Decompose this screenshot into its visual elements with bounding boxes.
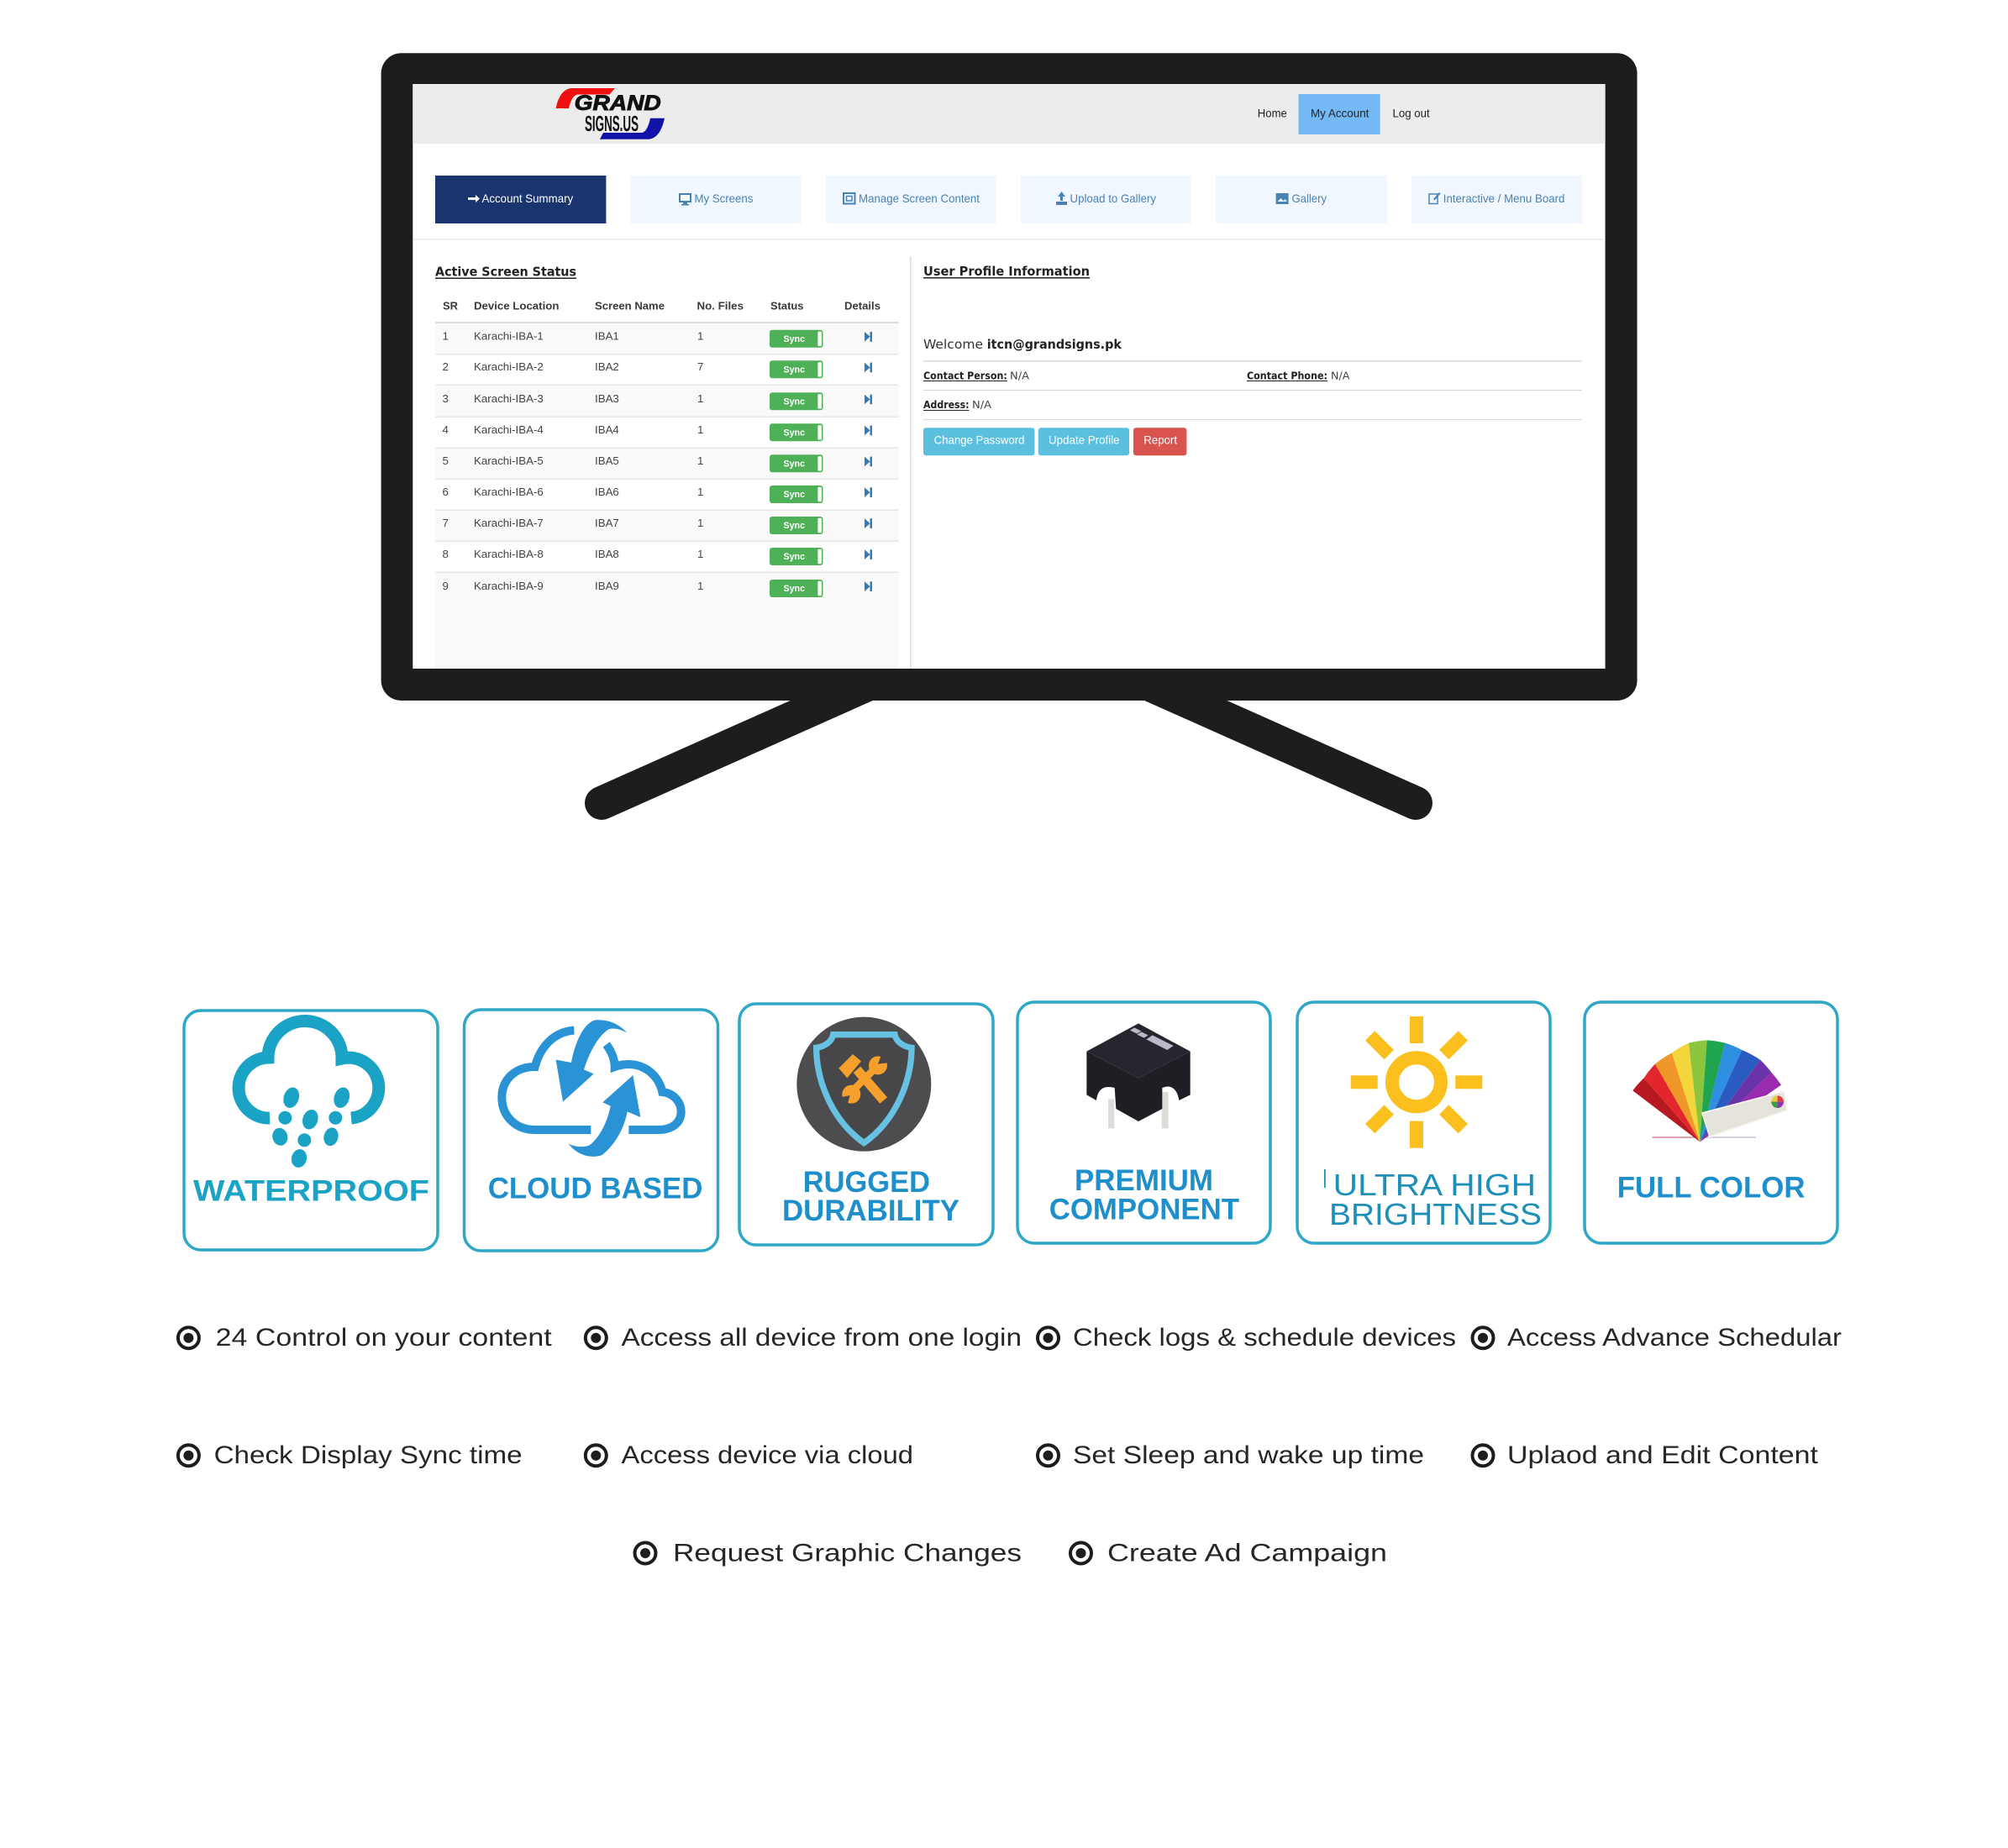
monitor — [381, 53, 1637, 803]
card: premium component — [1017, 1002, 1270, 1243]
row 8: Karachi-IBA-8 — [474, 548, 544, 560]
label: DURABILITY — [782, 1194, 959, 1227]
label: BRIGHTNESS — [1329, 1197, 1542, 1231]
row 2: Sync — [783, 365, 805, 375]
row 5: Sync — [783, 459, 805, 469]
label: PREMIUM — [1075, 1164, 1213, 1197]
card: ultra high brightness — [1297, 1002, 1550, 1243]
tab: account summary — [435, 176, 606, 223]
monitor bezel — [381, 53, 1637, 701]
row 5: IBA5 — [595, 454, 619, 467]
row 7: 7 — [442, 517, 449, 529]
row 2: IBA2 — [595, 360, 619, 373]
dashboard screen — [413, 84, 1606, 669]
row 3 — [442, 392, 872, 410]
button: change password — [923, 428, 1035, 455]
welcome line — [923, 337, 1122, 352]
tab: interactive menu board — [1411, 176, 1582, 223]
address: Address: — [923, 398, 970, 411]
button: report: Report — [1143, 433, 1177, 447]
row 6: 6 — [442, 486, 449, 498]
tab: manage screen content — [826, 176, 996, 223]
logo: GRAND — [575, 92, 661, 115]
row 5: Karachi-IBA-5 — [474, 454, 544, 467]
icon: sun — [1351, 1016, 1482, 1148]
table header: Screen Name — [595, 299, 665, 312]
navigation: My Account — [1311, 106, 1369, 119]
table header: No. Files — [697, 299, 744, 312]
row 9: Sync — [783, 584, 805, 594]
feature: access all devices: Access all device from one login — [622, 1324, 1022, 1352]
navigation — [1258, 94, 1430, 134]
row 3: Karachi-IBA-3 — [474, 392, 544, 405]
panel: user profile information — [923, 264, 1582, 455]
button: change password: Change Password — [934, 433, 1025, 447]
label: CLOUD BASED — [488, 1173, 702, 1205]
feature: display sync time: Check Display Sync time — [214, 1441, 523, 1469]
logo: SIGNS.US — [585, 111, 639, 136]
tab: manage screen content: Manage Screen Content — [859, 192, 980, 205]
tab: my screens: My Screens — [694, 192, 753, 205]
row 6: Sync — [783, 490, 805, 500]
feature: graphic changes: Request Graphic Changes — [673, 1539, 1022, 1567]
table header: SR — [443, 299, 459, 312]
feature: sleep and wake: Set Sleep and wake up time — [1073, 1441, 1424, 1469]
icon: shield with tools — [796, 1017, 931, 1152]
table header — [443, 299, 880, 312]
label — [1324, 1168, 1542, 1231]
contact details: Contact Phone: — [1247, 370, 1327, 382]
row 1: IBA1 — [595, 329, 619, 343]
row 4: 1 — [697, 423, 703, 436]
tab: my screens — [630, 176, 802, 223]
contact details — [923, 370, 1350, 382]
row 7: IBA7 — [595, 517, 619, 529]
icon: electronic component — [1086, 1023, 1191, 1128]
row 4: 4 — [442, 423, 449, 436]
row 6: Karachi-IBA-6 — [474, 486, 544, 498]
row 2: 2 — [442, 360, 449, 373]
table header: Details — [844, 299, 880, 312]
row 7: Sync — [783, 521, 805, 531]
feature: check logs: Check logs & schedule devices — [1073, 1324, 1456, 1352]
tab: interactive menu board: Interactive / Menu Board — [1443, 192, 1564, 205]
contact details: Contact Person: — [923, 370, 1007, 382]
row 8: Sync — [783, 552, 805, 562]
label: FULL COLOR — [1617, 1171, 1805, 1205]
welcome line: Welcome — [923, 337, 983, 352]
row 2: Karachi-IBA-2 — [474, 360, 544, 373]
card: waterproof — [184, 1011, 438, 1250]
row 9: 9 — [442, 580, 449, 592]
card: full color — [1585, 1002, 1837, 1243]
navigation: Home — [1258, 106, 1287, 119]
row 1: 1 — [442, 329, 449, 343]
feature: advance scheduler: Access Advance Schedular — [1507, 1324, 1842, 1352]
panel: active screen status — [435, 264, 899, 669]
heading: Active Screen Status — [435, 264, 576, 279]
label: WATERPROOF — [193, 1174, 429, 1207]
feature: ad campaign: Create Ad Campaign — [1107, 1539, 1387, 1567]
feature: device via cloud: Access device via cloud — [622, 1441, 913, 1469]
row 8: 8 — [442, 548, 449, 560]
row 7: 1 — [697, 517, 703, 529]
label — [782, 1166, 959, 1227]
button: update profile — [1038, 428, 1129, 455]
welcome line: itcn@grandsigns.pk — [987, 337, 1122, 352]
row 6: 1 — [697, 486, 703, 498]
row 3: 1 — [697, 392, 703, 405]
row 7 — [442, 517, 872, 534]
label: ULTRA HIGH — [1333, 1168, 1536, 1202]
row 8: IBA8 — [595, 548, 619, 560]
button: report — [1133, 428, 1186, 455]
row 1 — [442, 329, 872, 348]
card: rugged durability — [739, 1004, 993, 1245]
card: cloud based — [464, 1010, 718, 1251]
icon: rain cloud — [239, 1021, 379, 1169]
row 1: Sync — [783, 334, 805, 344]
row 5: 1 — [697, 454, 703, 467]
row 9 — [442, 580, 872, 597]
row 4: Sync — [783, 428, 805, 438]
row 1: Karachi-IBA-1 — [474, 329, 544, 343]
row 1: 1 — [697, 329, 703, 343]
row 6: IBA6 — [595, 486, 619, 498]
icon: colour fan — [1632, 1040, 1787, 1142]
button: update profile: Update Profile — [1049, 433, 1120, 447]
row 3: 3 — [442, 392, 449, 405]
tab: gallery — [1216, 176, 1387, 223]
row 4 — [442, 423, 872, 441]
row 7: Karachi-IBA-7 — [474, 517, 544, 529]
row 3: IBA3 — [595, 392, 619, 405]
navigation: Log out — [1393, 106, 1430, 119]
row 8 — [442, 548, 872, 565]
row 2: 7 — [697, 360, 703, 373]
contact details: N/A — [1010, 370, 1029, 382]
contact details: N/A — [1331, 370, 1350, 382]
feature: upload and edit: Uplaod and Edit Content — [1507, 1441, 1818, 1469]
label: COMPONENT — [1049, 1194, 1239, 1226]
tab: account summary: Account Summary — [482, 192, 573, 205]
row 9: 1 — [697, 580, 703, 592]
table header: Status — [770, 299, 803, 312]
monitor stand — [602, 672, 1416, 803]
label — [1049, 1164, 1239, 1226]
label: RUGGED — [803, 1166, 930, 1199]
tab: gallery: Gallery — [1292, 192, 1327, 205]
row 4: IBA4 — [595, 423, 619, 436]
status table — [435, 299, 899, 669]
row 6 — [442, 486, 872, 503]
icon: cloud sync — [502, 1020, 681, 1157]
row 2 — [442, 360, 872, 378]
row 9: IBA9 — [595, 580, 619, 592]
row 5: 5 — [442, 454, 449, 467]
row 4: Karachi-IBA-4 — [474, 423, 544, 436]
tab: upload to gallery — [1021, 176, 1191, 223]
address: N/A — [972, 398, 991, 411]
logo — [556, 88, 665, 139]
feature: 24 control: 24 Control on your content — [216, 1324, 552, 1352]
row 8: 1 — [697, 548, 703, 560]
table header: Device Location — [474, 299, 559, 312]
row 3: Sync — [783, 396, 805, 407]
row 9: Karachi-IBA-9 — [474, 580, 544, 592]
row 5 — [442, 454, 872, 472]
tab: upload to gallery: Upload to Gallery — [1070, 192, 1156, 205]
heading: User Profile Information — [923, 264, 1090, 279]
header bar — [413, 84, 1606, 144]
